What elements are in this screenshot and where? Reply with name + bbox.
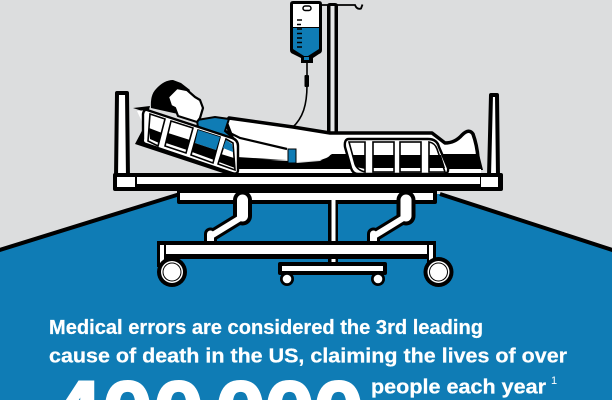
foot rail — [345, 139, 448, 174]
IV bag — [290, 1, 322, 128]
left leg — [210, 200, 242, 246]
shirt — [197, 117, 238, 160]
face — [168, 88, 203, 122]
right leg — [374, 200, 406, 246]
bed frame — [113, 173, 503, 191]
pillow — [133, 106, 238, 178]
statement text: Medical errors are considered the 3rd leading — [49, 317, 483, 339]
right wheel — [424, 257, 454, 287]
small stand — [278, 262, 387, 286]
IV stand — [322, 3, 362, 136]
people each year: people each year — [371, 376, 546, 398]
right post — [489, 95, 498, 176]
head rail — [143, 110, 238, 174]
left post — [116, 93, 128, 178]
floor — [0, 194, 612, 400]
base frame — [157, 241, 436, 267]
statement text — [49, 317, 567, 368]
statement text: cause of death in the US, claiming the lives of over — [49, 346, 567, 368]
center pole — [328, 200, 338, 264]
mattress — [237, 154, 483, 170]
footnote mark: 1 — [551, 375, 557, 387]
patient body — [226, 118, 478, 158]
under frame — [177, 188, 437, 204]
arm — [226, 131, 330, 163]
hair — [151, 80, 190, 114]
mattress base — [232, 169, 481, 175]
left wheel — [157, 257, 187, 287]
